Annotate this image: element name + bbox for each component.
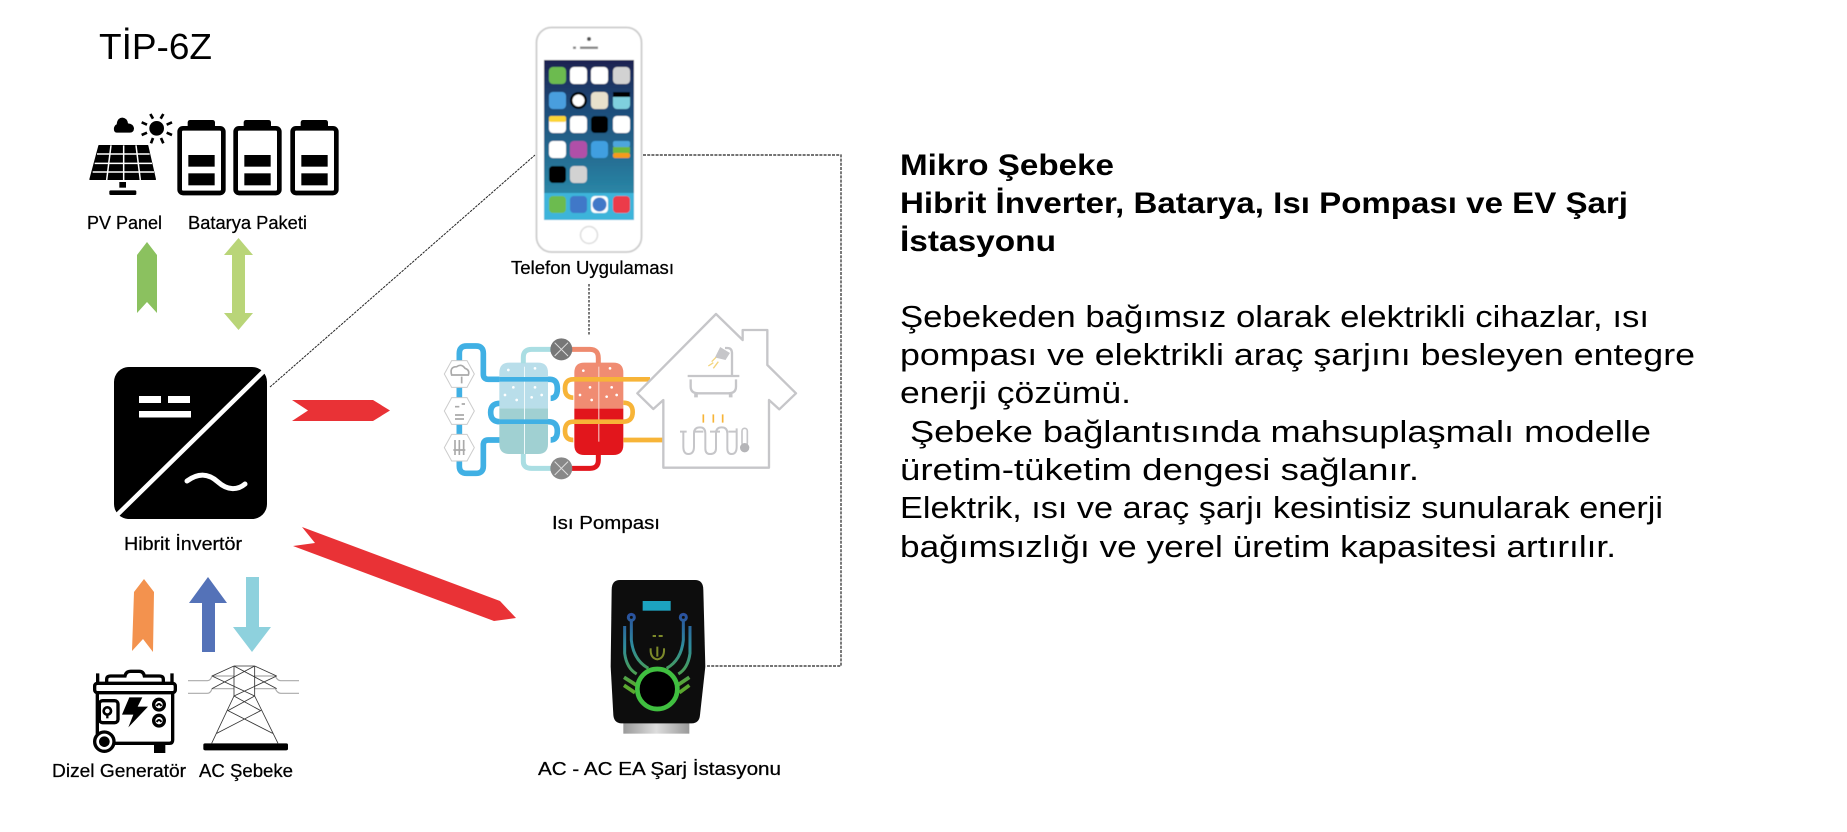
arrow: inverter to heat pump [292,400,390,421]
label: PV Panel: PV Panel [87,213,162,233]
description text [900,299,1695,564]
heading [900,149,1628,258]
heading: İstasyonu [900,225,1056,258]
arrow: battery two-way [224,238,253,330]
arrow: inverter to EV charger [293,527,516,621]
description text: üretim-tüketim dengesi sağlanır. [900,452,1419,487]
icon: diesel generator [95,671,175,753]
label: AC - AC EA Şarj İstasyonu: AC - AC EA Şarj İstasyonu [538,759,781,779]
label: Hibrit İnvertör: Hibrit İnvertör [124,534,242,554]
connector: inverter to phone [270,155,535,387]
title: TİP-6Z [99,26,212,67]
label: Batarya Paketi: Batarya Paketi [188,213,307,233]
icon: EV charging station [611,580,705,734]
description text: Şebeke bağlantısında mahsuplaşmalı modelle [910,414,1651,449]
house [637,314,796,468]
valves [550,338,572,479]
connector: phone to heat pump [588,284,590,335]
description text: enerji çözümü. [900,375,1131,410]
brine pipes [459,346,557,473]
heading: Hibrit İnverter, Batarya, Isı Pompası ve EV Şarj [900,187,1628,220]
arrow: generator to inverter [132,579,154,652]
arrow: PV to inverter [137,242,157,313]
condenser tank [574,363,623,455]
icon: transmission tower [188,666,299,750]
heading: Mikro Şebeke [900,149,1114,182]
description text: pompası ve elektrikli araç şarjını besleyen entegre [900,337,1695,372]
bath and shower [688,348,739,397]
arrow: inverter to grid [233,577,271,652]
arrow: grid to inverter [189,577,227,652]
source hexagons [444,361,474,461]
description text: bağımsızlığı ve yerel üretim kapasitesi artırılır. [900,529,1616,564]
evaporator tank [499,363,548,454]
connector: phone to EV charger [643,155,841,666]
icon: heat pump system [444,314,796,479]
icon: PV solar panel [90,114,172,195]
icon: battery pack [180,120,336,193]
label: Telefon Uygulaması: Telefon Uygulaması [511,258,674,278]
underfloor heating [680,427,737,454]
icon: smartphone app [536,28,642,252]
refrigerant pipes [523,349,598,468]
hot water pipes [565,379,663,440]
description text: Şebekeden bağımsız olarak elektrikli cihazlar, ısı [900,299,1649,334]
icon: hybrid inverter [114,367,267,519]
description text: Elektrik, ısı ve araç şarjı kesintisiz sunularak enerji [900,490,1663,525]
label: Dizel Generatör: Dizel Generatör [52,761,186,781]
label: AC Şebeke: AC Şebeke [199,761,293,781]
label: Isı Pompası: Isı Pompası [552,513,660,533]
